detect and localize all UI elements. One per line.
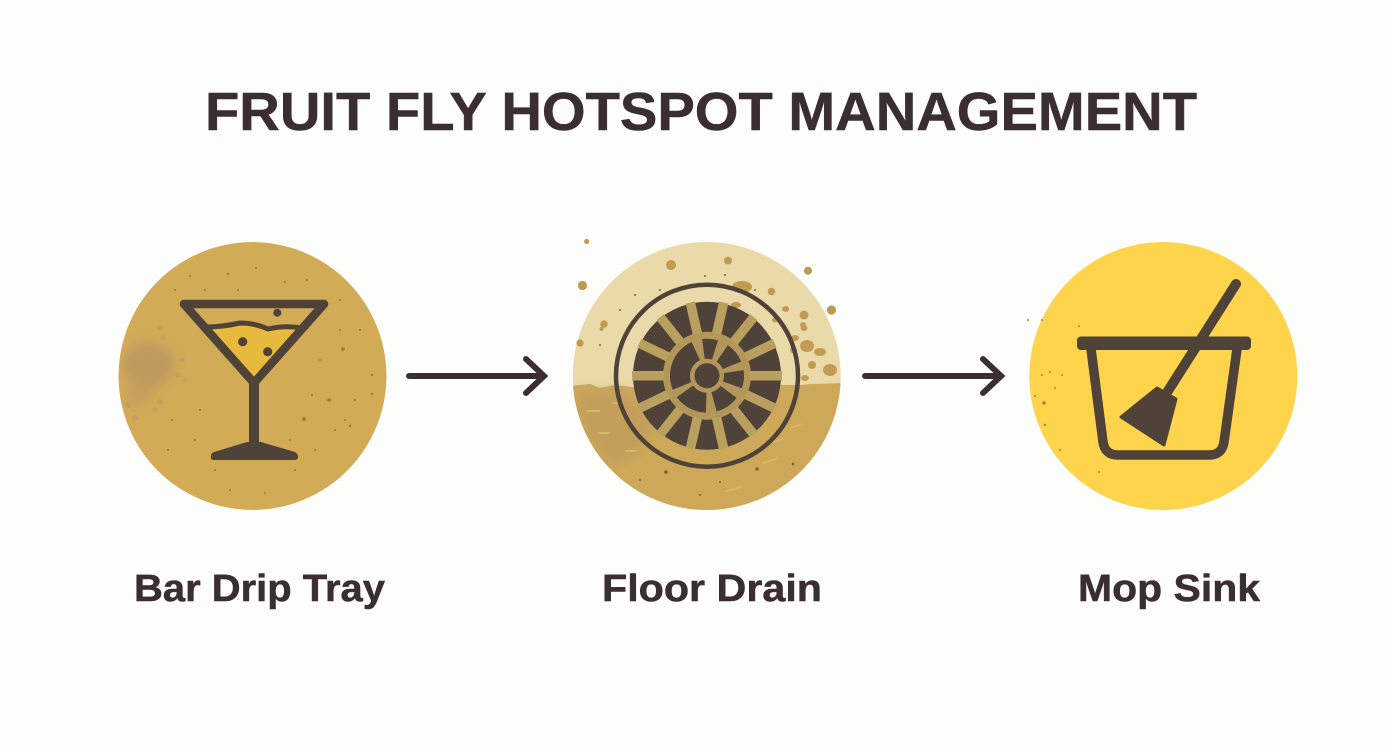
mop head [1121, 388, 1176, 445]
outer ring [616, 285, 798, 467]
panel: floor drain [570, 239, 845, 520]
panel: bar drip tray [118, 242, 386, 510]
hub plate [662, 331, 752, 421]
icon: drain grate [616, 285, 798, 467]
centre hub [694, 363, 720, 388]
speckles [1027, 319, 1100, 473]
stem [249, 383, 259, 445]
icon: martini glass [184, 304, 324, 460]
liquid [205, 322, 303, 383]
label: mop sink: Mop Sink [1078, 568, 1261, 610]
bubbles [238, 309, 281, 356]
liquid surface [206, 323, 302, 329]
base [211, 442, 298, 460]
panel: mop sink [1027, 242, 1297, 510]
arrow: second [865, 359, 1001, 393]
title: FRUIT FLY HOTSPOT MANAGEMENT [205, 82, 1197, 142]
circle: bar drip tray background [118, 242, 386, 510]
label: bar drip tray: Bar Drip Tray [134, 568, 385, 610]
splatter [576, 239, 836, 347]
label: floor drain: Floor Drain [602, 568, 822, 610]
circle: floor drain background [570, 242, 845, 520]
bucket rim [1077, 336, 1251, 350]
glass bowl [184, 304, 324, 383]
arrow: first [409, 359, 544, 393]
outer slots ring [648, 317, 766, 435]
mop handle [1166, 284, 1236, 394]
bucket body [1091, 349, 1237, 455]
inner slots [677, 345, 737, 406]
radial bars [632, 303, 782, 449]
circle: mop sink background [1029, 242, 1297, 510]
icon: mop in bucket [1077, 284, 1251, 455]
